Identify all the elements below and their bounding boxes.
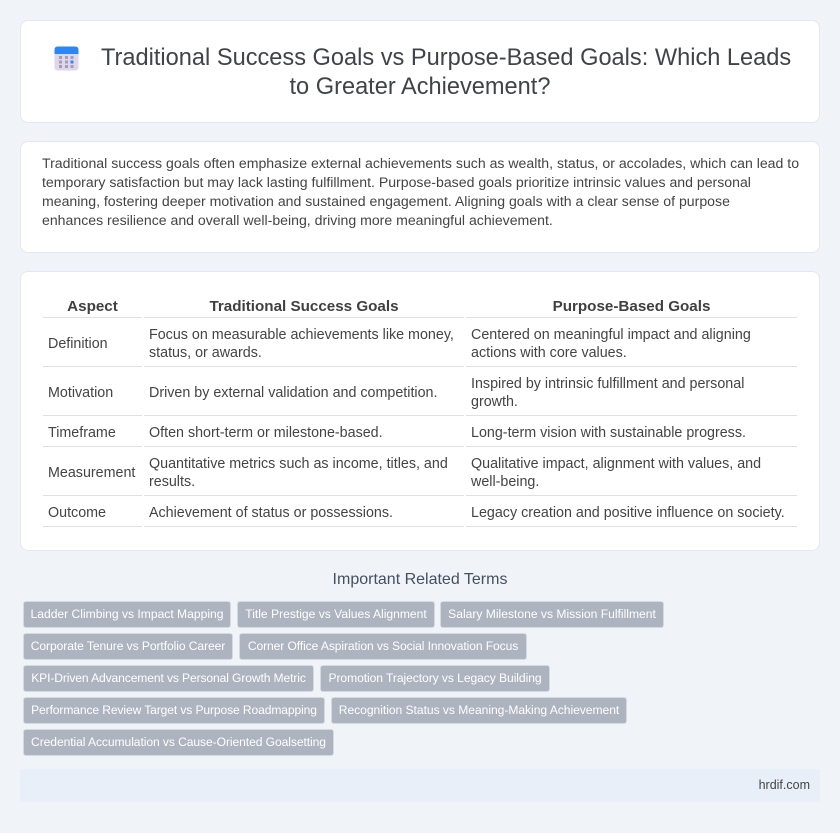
related term tags: Recognition Status vs Meaning-Making Achievement [339,703,619,717]
comparison table: Purpose-Based Goals [553,298,710,315]
comparison table: Measurement [48,465,135,481]
comparison table: Legacy creation and positive influence on society. [471,505,785,521]
related term tags: KPI-Driven Advancement vs Personal Growth Metric [31,671,306,685]
related terms heading: Important Related Terms [333,571,507,588]
comparison table: status, or awards. [149,345,262,361]
comparison table: Often short-term or milestone-based. [149,425,383,441]
footer bar [20,769,820,802]
comparison table: Aspect [67,298,118,315]
intro panel [20,141,820,253]
text: Traditional Success Goals vs Purpose-Based Goals: Which Leads [101,45,791,71]
related term tags: Salary Milestone vs Mission Fulfillment [448,607,656,621]
related term tags: Corner Office Aspiration vs Social Innovation Focus [248,639,518,653]
comparison table: Quantitative metrics such as income, titles, and [149,456,448,472]
related term tags: Performance Review Target vs Purpose Roadmapping [31,703,317,717]
comparison table: Focus on measurable achievements like money, [149,327,454,343]
icon: calendar [54,46,78,70]
comparison table: Inspired by intrinsic fulfillment and personal [471,376,744,392]
footer source: hrdif.com [759,778,810,792]
comparison table: Long-term vision with sustainable progress. [471,425,746,441]
comparison table: growth. [471,394,518,410]
comparison table: Outcome [48,505,106,521]
comparison table: Qualitative impact, alignment with values, and [471,456,761,472]
intro text: enhances resilience and overall well-being, driving more meaningful achievement. [42,212,553,228]
comparison table: Traditional Success Goals [209,298,399,315]
text: to Greater Achievement? [290,74,550,100]
related term tags: Title Prestige vs Values Alignment [245,607,427,621]
comparison table: actions with core values. [471,345,627,361]
related term tags: Credential Accumulation vs Cause-Oriented Goalsetting [31,735,326,749]
comparison table: well-being. [471,474,539,490]
related term tags: Ladder Climbing vs Impact Mapping [31,607,223,621]
comparison table: Timeframe [48,425,116,441]
related term tags: Corporate Tenure vs Portfolio Career [31,639,225,653]
comparison table: Definition [48,336,108,352]
related term tags [23,601,664,756]
comparison table [43,298,797,527]
intro text [42,155,799,228]
related term tags: Promotion Trajectory vs Legacy Building [328,671,542,685]
comparison table: Driven by external validation and competition. [149,385,437,401]
comparison table: Motivation [48,385,113,401]
intro text: Traditional success goals often emphasize external achievements such as wealth, status, or accolades, which can lead to [42,155,799,171]
comparison table panel [20,271,820,551]
header panel [20,20,820,123]
comparison table: Centered on meaningful impact and aligning [471,327,751,343]
title [101,45,791,100]
intro text: temporary satisfaction but may lack lasting fulfillment. Purpose-based goals prioritize intrinsic values and personal [42,174,751,190]
comparison table: results. [149,474,195,490]
comparison table: Achievement of status or possessions. [149,505,393,521]
intro text: meaning, fostering deeper motivation and sustained engagement. Aligning goals with a clear sense of purpose [42,193,730,209]
